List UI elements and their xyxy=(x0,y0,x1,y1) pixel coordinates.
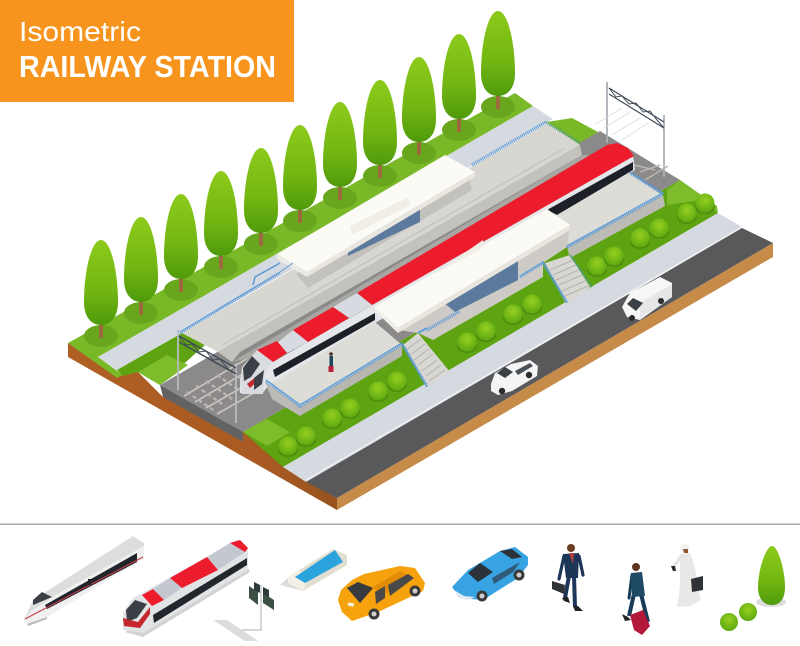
garden: middle lighter edge xyxy=(433,277,567,372)
near canopy roof xyxy=(374,209,570,333)
ground between track and road xyxy=(243,180,718,467)
icon: red and white train xyxy=(123,540,250,637)
icon: man in white robe xyxy=(671,544,703,607)
bushes xyxy=(278,194,715,457)
far platform railings xyxy=(180,122,580,333)
roof red main xyxy=(357,143,634,305)
icon: tree and bushes xyxy=(720,546,786,631)
row of trees xyxy=(84,11,515,347)
left stairs xyxy=(403,333,450,387)
passenger on platform xyxy=(328,352,334,372)
near platform railings xyxy=(266,172,663,406)
train nose xyxy=(240,350,273,394)
back grass strip xyxy=(68,93,533,378)
back sidewalk xyxy=(98,106,553,370)
back gantry xyxy=(596,82,664,177)
icon: white high-speed train xyxy=(24,536,144,626)
white van on road xyxy=(622,277,672,321)
roof silver sections xyxy=(333,293,372,318)
front gantry xyxy=(178,330,236,423)
near platform left xyxy=(265,322,402,416)
icon: blue car xyxy=(452,547,528,602)
front level crossing rails xyxy=(184,358,268,414)
train body side xyxy=(240,155,635,394)
icon: businessman with briefcase xyxy=(552,544,583,611)
right stairs xyxy=(545,255,590,305)
far canopy roof xyxy=(277,155,475,277)
icon: orange car xyxy=(338,566,425,621)
divider xyxy=(0,524,800,525)
near window xyxy=(443,258,518,312)
garden: right lighter corner xyxy=(667,180,718,213)
roof red sections xyxy=(293,307,349,342)
inner grass strips xyxy=(117,118,598,385)
far platform xyxy=(182,123,600,362)
track bed xyxy=(160,131,680,442)
title banner xyxy=(0,0,294,102)
back level crossing rails xyxy=(634,165,668,180)
near building wall xyxy=(398,226,570,340)
garden: left green bed xyxy=(243,419,290,446)
white SUV on road xyxy=(491,360,538,395)
road xyxy=(306,227,773,498)
train at platform xyxy=(240,143,635,394)
far window xyxy=(348,205,420,256)
near platform right xyxy=(557,173,665,258)
train windows xyxy=(273,313,375,377)
base: soil block xyxy=(68,243,773,510)
icon: bench xyxy=(280,549,347,591)
icon: traveller with red suitcase xyxy=(622,563,650,635)
title line 1: Isometric xyxy=(19,16,141,47)
title line 2: RAILWAY STATION xyxy=(19,49,276,84)
sidewalk along road xyxy=(283,213,742,482)
icon: platform sign xyxy=(213,582,274,641)
far canopy building wall xyxy=(296,174,472,288)
